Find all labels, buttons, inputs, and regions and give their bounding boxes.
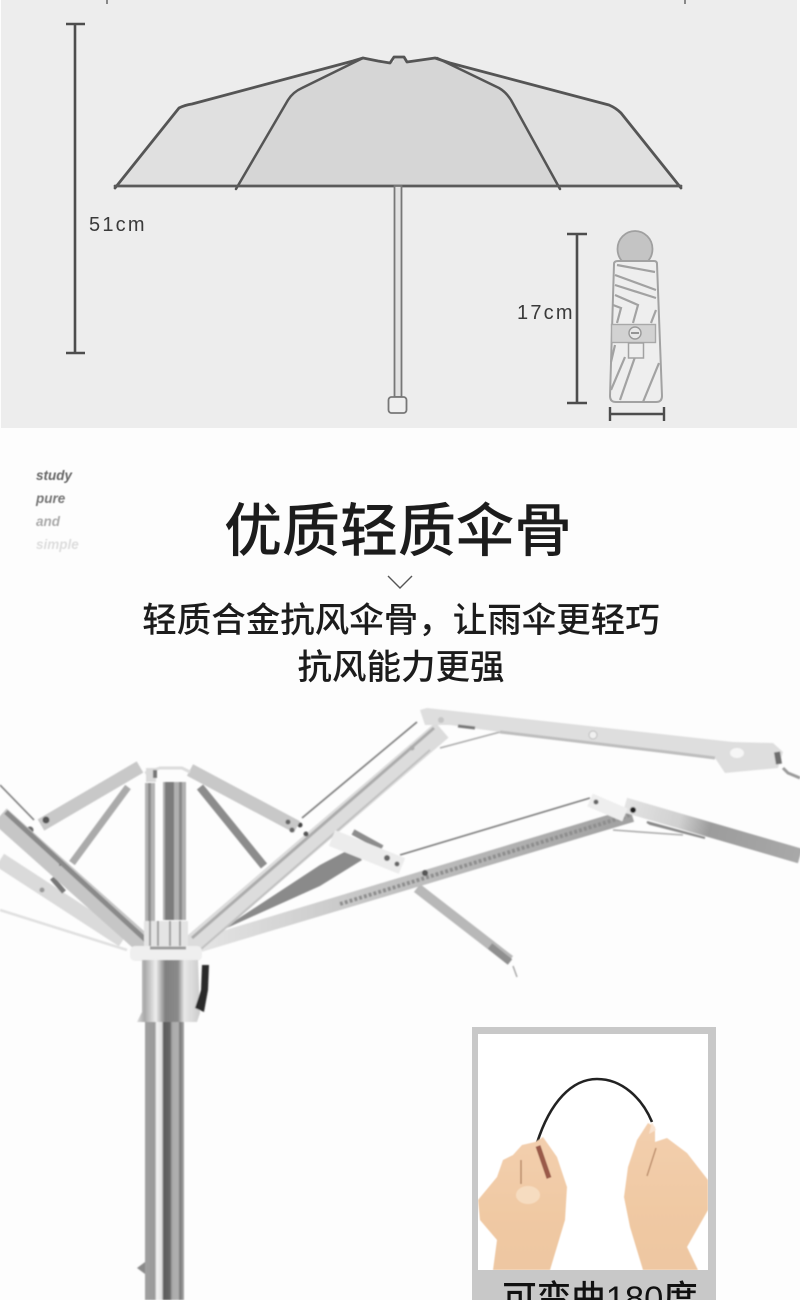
- label: 51cm: 51cm: [89, 214, 147, 236]
- photo: umbrella frame: [0, 708, 800, 1300]
- left hand: [478, 1137, 567, 1270]
- shaft upper tubes: [145, 782, 186, 923]
- long ribbed strut: [200, 815, 632, 945]
- subtitle line 2: 抗风能力更强: [298, 649, 504, 687]
- inner diagonal braces: [72, 787, 264, 866]
- diagram: open and folded umbrella: [66, 0, 686, 421]
- height bar: 51cm: [66, 24, 85, 353]
- runner collar: [130, 921, 202, 961]
- label: 17cm: 17cm: [517, 302, 575, 324]
- panel: umbrella dimensions: [1, 0, 797, 428]
- tagline: study pure and simple: simple: [36, 537, 79, 552]
- outer rib lower: [590, 800, 800, 856]
- tagline: study pure and simple: [35, 468, 79, 552]
- callout: bendable 180 degrees: [472, 1027, 716, 1300]
- dark strut: [218, 848, 362, 932]
- icon: open umbrella canopy: [115, 57, 681, 189]
- short link bar: [332, 838, 402, 866]
- width bar: [610, 407, 664, 421]
- main lower collar: [137, 960, 209, 1022]
- hub top: [145, 768, 190, 782]
- height bar: 17cm: [567, 234, 587, 403]
- icon: chevron: [388, 576, 412, 589]
- tail rib: [353, 832, 517, 977]
- short strut left: [26, 767, 140, 834]
- main strut: [186, 728, 442, 950]
- left struts: [0, 812, 148, 948]
- tagline: study pure and simple: and: [36, 514, 60, 529]
- icon: folded umbrella: [610, 231, 662, 402]
- outer rib upper: [420, 708, 800, 778]
- photo: hands bending rib: [478, 1034, 708, 1270]
- right hand: [624, 1122, 708, 1270]
- tagline: study pure and simple: study: [36, 468, 72, 483]
- subtitle line 1: 轻质合金抗风伞骨，让雨伞更轻巧: [142, 602, 660, 640]
- wire arc: [537, 1079, 652, 1143]
- short strut right: [190, 770, 297, 832]
- thin rods: [0, 722, 683, 950]
- shaft button: [137, 1262, 145, 1274]
- top edge ticks: [107, 0, 685, 4]
- shaft: [145, 1022, 184, 1300]
- icon: umbrella shaft and handle: [388, 186, 406, 413]
- tagline: study pure and simple: pure: [36, 491, 65, 506]
- title: 优质轻质伞骨: [224, 499, 572, 564]
